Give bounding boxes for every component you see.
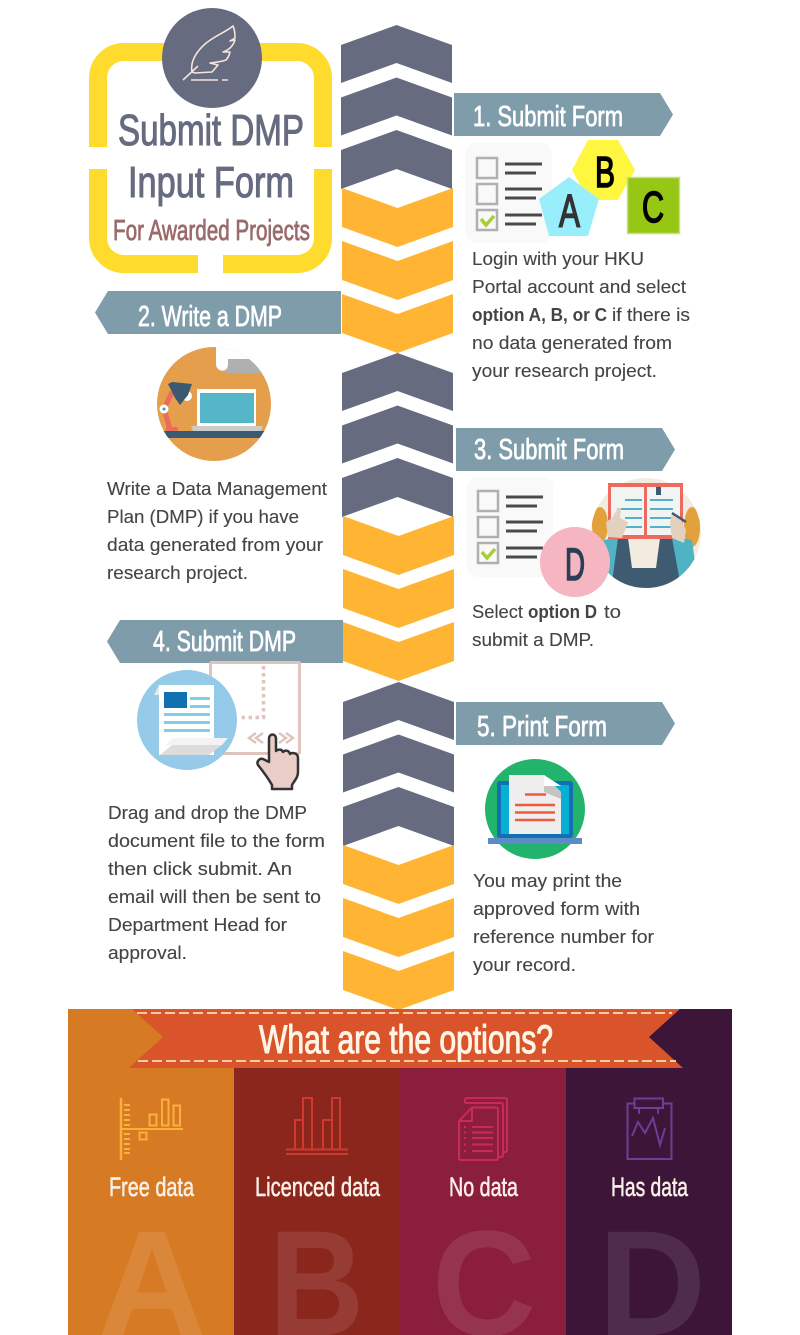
column C: no data: No data (449, 1172, 518, 1202)
text: step 4 description: Drag and drop the DMP (108, 803, 307, 823)
text: step 5 description: reference number for (473, 927, 654, 947)
text: step 5 description: approved form with (473, 899, 640, 919)
step 1 panel (454, 93, 690, 381)
icon: person reading book (591, 478, 701, 588)
text: step 4 description: approval. (108, 943, 187, 963)
column D: has data: Has data (611, 1172, 688, 1202)
yellow frame (98, 52, 323, 264)
ribbon heading: What are the options? (259, 1018, 553, 1062)
text: step 3 description: submit a DMP. (472, 630, 594, 650)
column A: free data: Free data (109, 1172, 194, 1202)
banner: step 2: 2. Write a DMP (138, 301, 282, 333)
chevron group 1 (341, 25, 453, 353)
panel: what are the options (68, 1009, 732, 1335)
banner: step 1 (454, 93, 673, 136)
text: step 2 description: research project. (107, 563, 248, 583)
icon: letter D circle (540, 527, 610, 597)
heading: Submit DMP Input Form: Submit DMP (118, 106, 304, 155)
text: step 5 description: your record. (473, 955, 576, 975)
icon: checklist (466, 477, 554, 577)
column A: free data (68, 1009, 234, 1335)
chevron group 2 (342, 353, 454, 681)
icon: quill in circle (162, 8, 262, 108)
icon: laptop on desk (157, 347, 271, 461)
text: step 4 description (108, 803, 325, 963)
step 5 panel (456, 702, 675, 975)
step 3 panel (456, 428, 701, 650)
text: step 1 description: Login with your HKU (472, 249, 644, 269)
heading: Submit DMP Input Form: Input Form (128, 158, 294, 207)
text: step 1 description: option A, B, or C (472, 305, 607, 325)
step 2 panel (95, 291, 341, 583)
banner: step 5 (456, 702, 675, 745)
text: step 3 description: Select (472, 602, 523, 622)
text: step 1 description: Portal account and select (472, 277, 686, 297)
banner: step 3 (456, 428, 675, 471)
icon: checklist with A B C: B (595, 148, 615, 197)
text: step 4 description: then click submit. An (108, 859, 292, 879)
subheading: For Awarded Projects (113, 215, 310, 247)
text: step 3 description: option D (528, 602, 597, 622)
icon: letter D circle: D (565, 539, 585, 590)
text: step 1 description: if there is (612, 305, 690, 325)
icon: checklist with A B C: C (642, 183, 664, 232)
icon: checklist with A B C (465, 140, 680, 243)
banner: step 4 (107, 620, 343, 663)
icon: checklist with A B C: A (559, 185, 580, 237)
text: step 2 description: data generated from your (107, 535, 323, 555)
text: step 4 description: Department Head for (108, 915, 287, 935)
heading: Submit DMP Input Form (118, 106, 304, 207)
chevron group 3 (343, 682, 454, 1010)
text: step 5 description: You may print the (473, 871, 622, 891)
banner: step 3: 3. Submit Form (474, 434, 624, 466)
icon: printed form on laptop (485, 759, 585, 859)
ribbon heading (129, 1009, 683, 1068)
text: step 1 description: your research project. (472, 361, 657, 381)
title panel (98, 8, 323, 264)
text: step 3 description: to (604, 602, 621, 622)
banner: step 1: 1. Submit Form (473, 101, 623, 133)
text: step 2 description: Plan (DMP) if you have (107, 507, 299, 527)
banner: step 5: 5. Print Form (477, 711, 607, 743)
central chevron column (341, 25, 454, 1010)
text: step 3 description (472, 602, 621, 650)
column B: licenced data: Licenced data (255, 1172, 380, 1202)
column C: no data (400, 1009, 566, 1335)
icon: drag and drop document (137, 662, 300, 789)
column D: has data (566, 1009, 732, 1335)
step 4 panel (107, 620, 343, 963)
text: step 4 description: document file to the form (108, 831, 325, 851)
banner: step 2 (95, 291, 341, 334)
column B: licenced data (234, 1009, 400, 1335)
banner: step 4: 4. Submit DMP (153, 626, 296, 658)
text: step 5 description (473, 871, 654, 975)
text: step 2 description: Write a Data Management (107, 479, 327, 499)
text: step 4 description: email will then be sent to (108, 887, 321, 907)
text: step 1 description: no data generated from (472, 333, 672, 353)
text: step 2 description (107, 479, 327, 583)
text: step 1 description (472, 249, 690, 381)
